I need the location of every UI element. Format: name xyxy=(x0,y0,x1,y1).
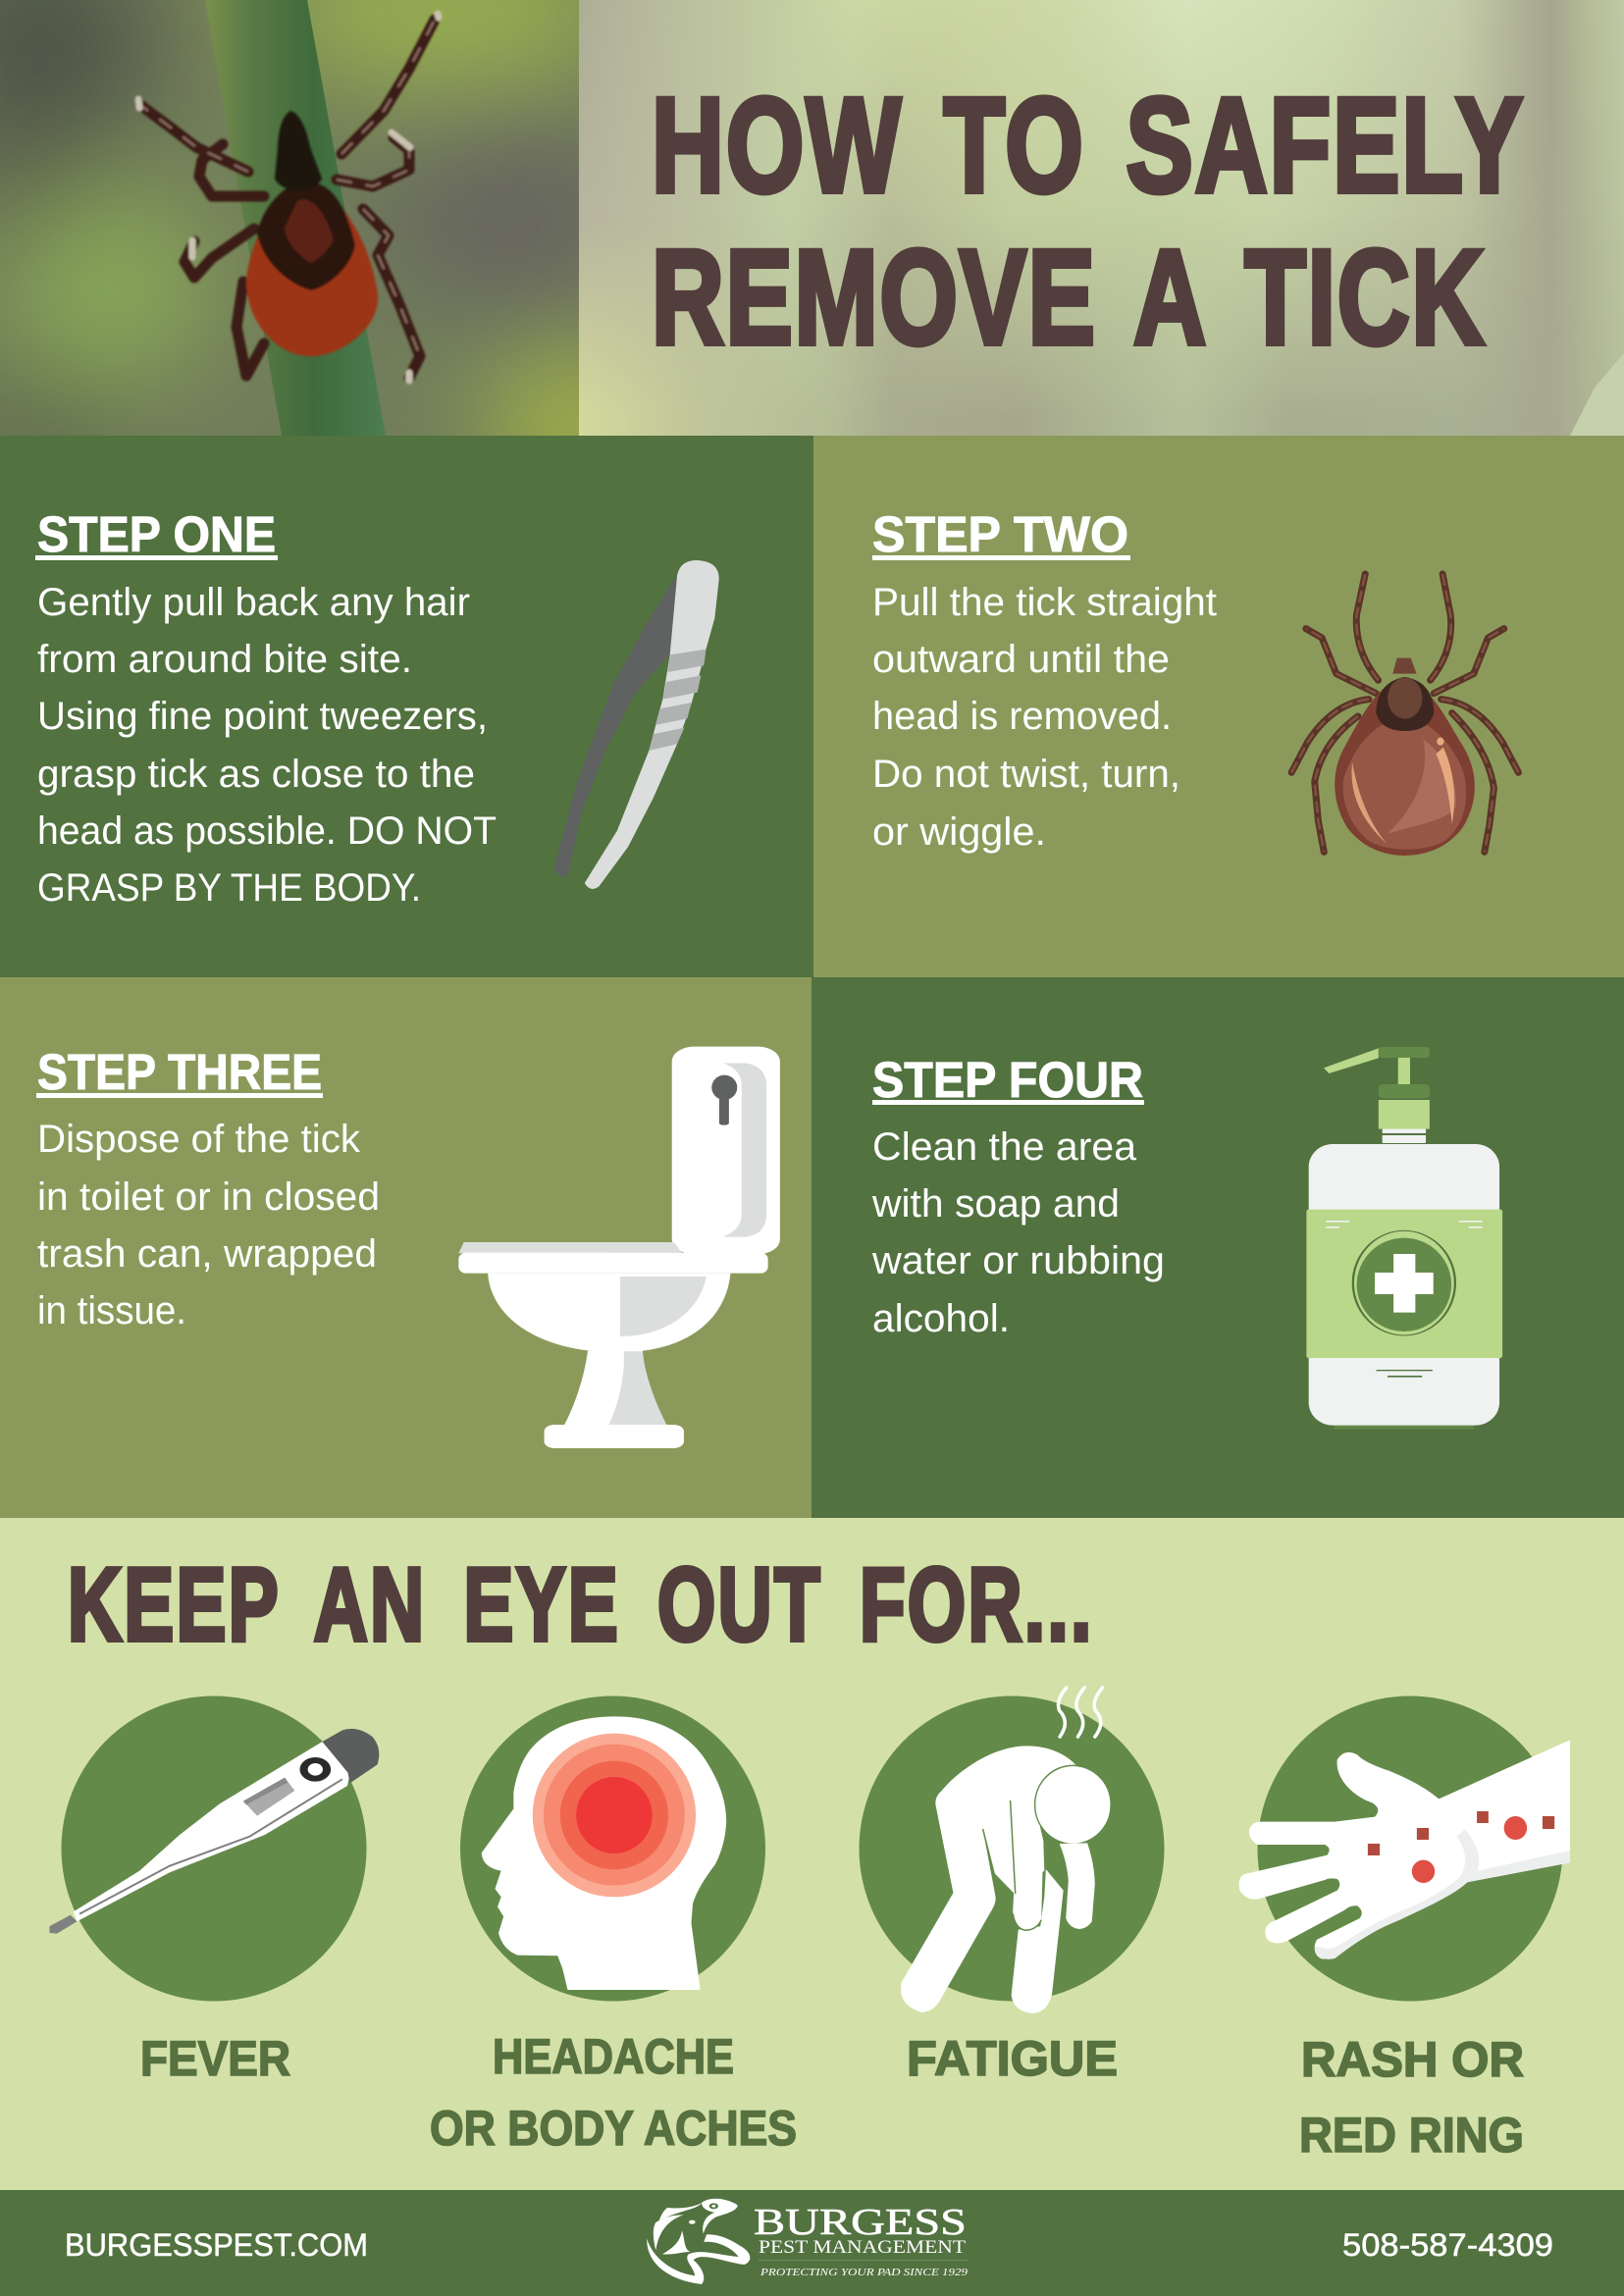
panel: step three xyxy=(0,977,812,1518)
stem xyxy=(205,0,386,436)
step two text: or wiggle. xyxy=(872,810,1046,854)
step four text: Clean the area xyxy=(872,1125,1137,1169)
icon: toilet xyxy=(458,1047,780,1448)
symptom: fever xyxy=(49,1696,379,2086)
icon: steam lines xyxy=(1059,1688,1102,1737)
step three text: in tissue. xyxy=(37,1289,186,1332)
label: rash or red ring: RASH OR xyxy=(1301,2032,1524,2087)
step two text: Do not twist, turn, xyxy=(872,753,1180,796)
step one text: Using fine point tweezers, xyxy=(37,695,488,738)
step four heading: STEP FOUR xyxy=(872,1052,1143,1108)
logo: frog and company name: PROTECTING YOUR PAD SINCE 1929 xyxy=(760,2267,969,2278)
step one text: head as possible. DO NOT xyxy=(37,809,497,853)
step four text: alcohol. xyxy=(872,1297,1010,1340)
symptom: rash xyxy=(1239,1696,1570,2163)
website: BURGESSPEST.COM xyxy=(65,2227,368,2263)
phone number: 508-587-4309 xyxy=(1342,2227,1553,2263)
panel: keep an eye out for xyxy=(0,1518,1624,2190)
symptom: fatigue xyxy=(860,1688,1164,2086)
icon: tweezers xyxy=(554,560,719,889)
header photo: tick on a stem xyxy=(0,0,579,436)
icon: frog xyxy=(647,2199,750,2284)
step two text: Pull the tick straight xyxy=(872,581,1217,624)
icon: tick illustration xyxy=(1291,574,1518,856)
step two text: head is removed. xyxy=(872,695,1172,738)
header background: blurred grass xyxy=(579,0,1624,436)
step one heading: STEP ONE xyxy=(37,506,276,562)
panel: step two xyxy=(813,436,1624,977)
logo: frog and company name xyxy=(647,2199,969,2284)
step one text: grasp tick as close to the xyxy=(37,753,475,796)
title: HOW TO SAFELY xyxy=(652,70,1523,220)
icon: thermometer xyxy=(49,1729,379,1934)
title: REMOVE A TICK xyxy=(652,222,1484,372)
step two heading: STEP TWO xyxy=(872,506,1128,562)
step two text xyxy=(872,581,1217,854)
icon: soap bottle xyxy=(1306,1047,1502,1430)
step one text: GRASP BY THE BODY. xyxy=(37,866,421,910)
tick body xyxy=(244,209,379,357)
step three text: Dispose of the tick xyxy=(37,1118,361,1161)
icon: tired person xyxy=(901,1688,1111,2013)
step three text: trash can, wrapped xyxy=(37,1232,377,1276)
step one text: from around bite site. xyxy=(37,638,412,681)
title xyxy=(652,70,1523,372)
label: rash or red ring xyxy=(1299,2032,1524,2163)
label: rash or red ring: RED RING xyxy=(1299,2108,1524,2163)
logo: frog and company name: PEST MANAGEMENT xyxy=(759,2237,966,2258)
icon: hand with rash xyxy=(1239,1740,1570,1959)
label: fever: FEVER xyxy=(140,2031,290,2086)
step one text xyxy=(37,581,497,910)
logo: frog and company name: BURGESS xyxy=(754,2202,967,2243)
label: headache or body aches: OR BODY ACHES xyxy=(430,2101,797,2156)
step one text: Gently pull back any hair xyxy=(37,581,470,624)
step two text: outward until the xyxy=(872,638,1170,681)
section heading: KEEP AN EYE OUT FOR... xyxy=(68,1545,1091,1662)
footer xyxy=(0,2190,1624,2296)
step three text xyxy=(37,1118,380,1332)
step three heading: STEP THREE xyxy=(37,1044,322,1100)
label: headache or body aches: HEADACHE xyxy=(493,2029,734,2084)
step four text xyxy=(871,1125,1165,1340)
icon: head with pain rings xyxy=(482,1716,726,1990)
step four text: water or rubbing xyxy=(871,1239,1165,1282)
tick legs xyxy=(138,14,439,381)
symptom: headache xyxy=(430,1696,797,2156)
label: headache or body aches xyxy=(430,2029,797,2156)
step three text: in toilet or in closed xyxy=(37,1175,380,1219)
panel: step four xyxy=(812,977,1624,1518)
step four text: with soap and xyxy=(871,1182,1120,1226)
label: fatigue: FATIGUE xyxy=(907,2031,1118,2086)
panel: step one xyxy=(0,436,813,977)
